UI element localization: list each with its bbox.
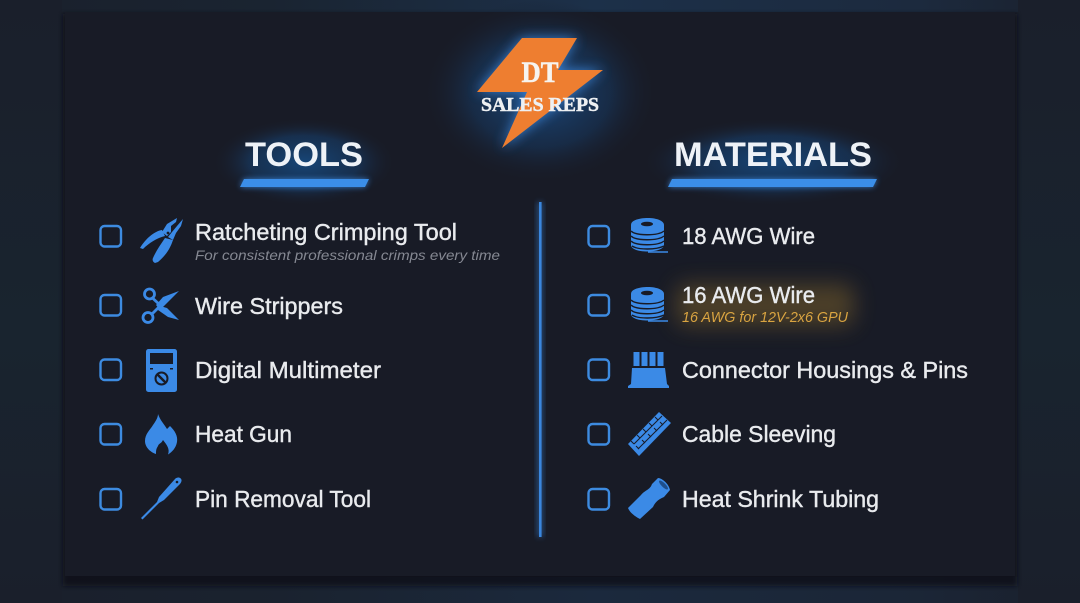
- heading: tools: [212, 118, 396, 206]
- logo: DT Sales Reps lightning bolt: [422, 0, 658, 184]
- divider: [537, 202, 543, 537]
- logo: DT Sales Reps lightning bolt: SALES REPS: [481, 94, 599, 116]
- item: 16 AWG wire highlighted: [588, 282, 854, 326]
- item: ratcheting crimping tool: Ratcheting Crimping Tool: [195, 219, 457, 245]
- item: 18 AWG wire: 18 AWG Wire: [682, 223, 815, 249]
- item: 16 AWG wire highlighted: 16 AWG Wire: [682, 282, 815, 308]
- item: wire strippers: [100, 289, 343, 322]
- tools list: [100, 218, 500, 520]
- item: cable sleeving: Cable Sleeving: [682, 421, 836, 447]
- item: heat gun: [100, 414, 292, 454]
- item: connector housings and pins: [588, 352, 968, 388]
- item: wire strippers: Wire Strippers: [195, 293, 343, 319]
- item: heat shrink tubing: Heat Shrink Tubing: [682, 486, 879, 512]
- heading: materials: [641, 118, 905, 206]
- item: ratcheting crimping tool: For consistent professional crimps every time: [195, 247, 500, 263]
- item: digital multimeter: Digital Multimeter: [195, 357, 381, 383]
- item: heat gun: Heat Gun: [195, 421, 292, 447]
- item: heat shrink tubing: [588, 478, 879, 519]
- item: 16 AWG wire highlighted: 16 AWG for 12V-2x6 GPU: [682, 310, 849, 326]
- item: ratcheting crimping tool: [100, 218, 500, 263]
- item: cable sleeving: [588, 412, 836, 456]
- item: pin removal tool: [100, 478, 371, 520]
- materials list: [588, 218, 968, 519]
- logo: DT Sales Reps lightning bolt: DT: [522, 56, 558, 89]
- heading: tools: TOOLS: [245, 136, 363, 174]
- heading: materials: MATERIALS: [674, 136, 872, 174]
- item: digital multimeter: [100, 349, 381, 392]
- item: 18 AWG wire: [588, 218, 815, 252]
- item: connector housings and pins: Connector Housings & Pins: [682, 357, 968, 383]
- item: pin removal tool: Pin Removal Tool: [195, 486, 371, 512]
